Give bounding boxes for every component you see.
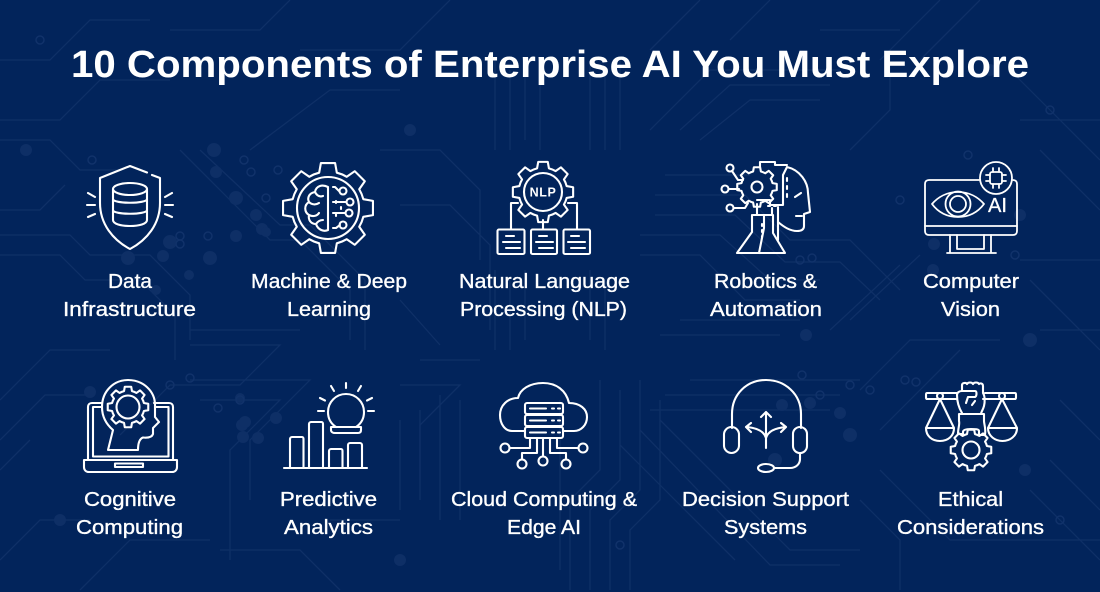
label: Data (108, 270, 153, 293)
panel: decision support systems (682, 380, 849, 539)
panel: machine and deep learning (251, 163, 407, 321)
label: Infrastructure (63, 298, 196, 321)
panel: data infrastructure (63, 166, 196, 321)
label: Analytics (284, 516, 373, 539)
label: Computing (76, 516, 183, 539)
title: 10 Components of Enterprise AI You Must Explore (71, 44, 1029, 86)
panel: cloud computing and edge AI (451, 383, 637, 539)
panel: natural language processing (459, 162, 630, 321)
icon: shield with database (87, 166, 173, 249)
icon: NLP gear and documents (498, 162, 590, 254)
panel: robotics and automation (710, 162, 822, 321)
label: Computer (923, 270, 1019, 293)
panel: computer vision (923, 162, 1019, 321)
panel: predictive analytics (280, 383, 377, 539)
label: Natural Language (459, 270, 630, 293)
label: Ethical (938, 488, 1003, 511)
icon: cloud with server and nodes (500, 383, 588, 468)
icon: gear with brain (283, 163, 373, 253)
label: Machine & Deep (251, 270, 407, 293)
label: Cloud Computing & (451, 488, 637, 511)
icon: bars with crystal ball (284, 383, 374, 468)
icon: NLP gear and documents: NLP (530, 186, 556, 200)
icon: scales with fist and gear (926, 382, 1017, 470)
label: Learning (287, 298, 371, 321)
icon: robot head with gear (722, 162, 810, 253)
icon: headset with arrows (724, 380, 807, 472)
label: Systems (724, 516, 807, 539)
label: Cognitive (84, 488, 176, 511)
label: Edge AI (507, 516, 581, 539)
label: Decision Support (682, 488, 849, 511)
label: Robotics & (714, 270, 817, 293)
label: Considerations (897, 516, 1044, 539)
panel: cognitive computing (76, 380, 183, 539)
icon: monitor with eye, chip and AI: AI (988, 195, 1007, 217)
label: Vision (941, 298, 1000, 321)
icon: monitor with eye, chip and AI (925, 162, 1017, 253)
label: Processing (NLP) (460, 298, 627, 321)
label: Predictive (280, 488, 377, 511)
panel: ethical considerations (897, 382, 1044, 539)
icon: laptop with head and gear (84, 380, 177, 472)
label: Automation (710, 298, 822, 321)
